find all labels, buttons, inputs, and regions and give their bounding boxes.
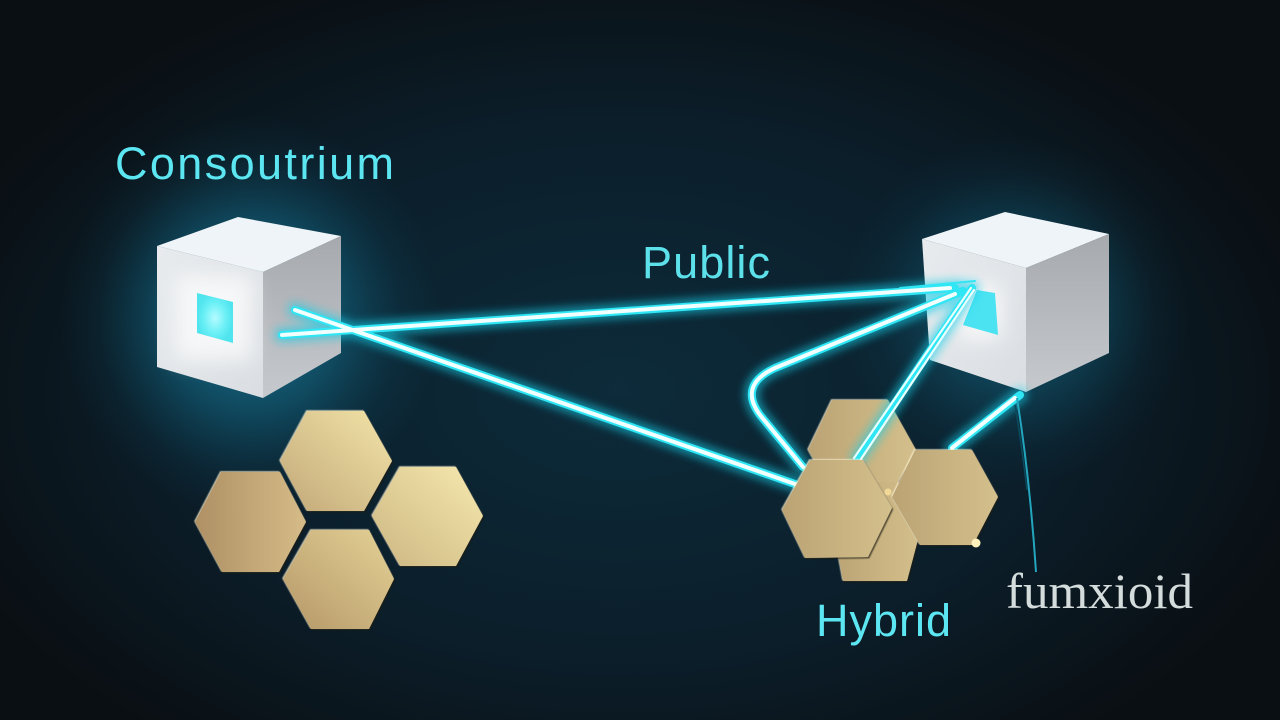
label: Consoutrium: Consoutrium (115, 138, 394, 189)
cube: Public node (922, 212, 1109, 392)
cube: Consortium node (157, 217, 341, 398)
label: Hybrid: Hybrid (816, 595, 951, 646)
right cube glow (840, 135, 1190, 485)
cube core light (958, 284, 1002, 340)
label: fumxioid: fumxioid (1006, 563, 1193, 619)
network connection lines (282, 281, 1020, 484)
hexagon cluster: right, front layer (782, 450, 998, 558)
hexagon cluster: right, back layer (808, 400, 920, 581)
thin callout line (1015, 398, 1036, 572)
left cube glow (60, 115, 440, 515)
gold highlights (884, 488, 980, 548)
hexagon cluster: left (195, 411, 483, 629)
label: Public: Public (642, 237, 770, 288)
cube core light (176, 276, 252, 360)
